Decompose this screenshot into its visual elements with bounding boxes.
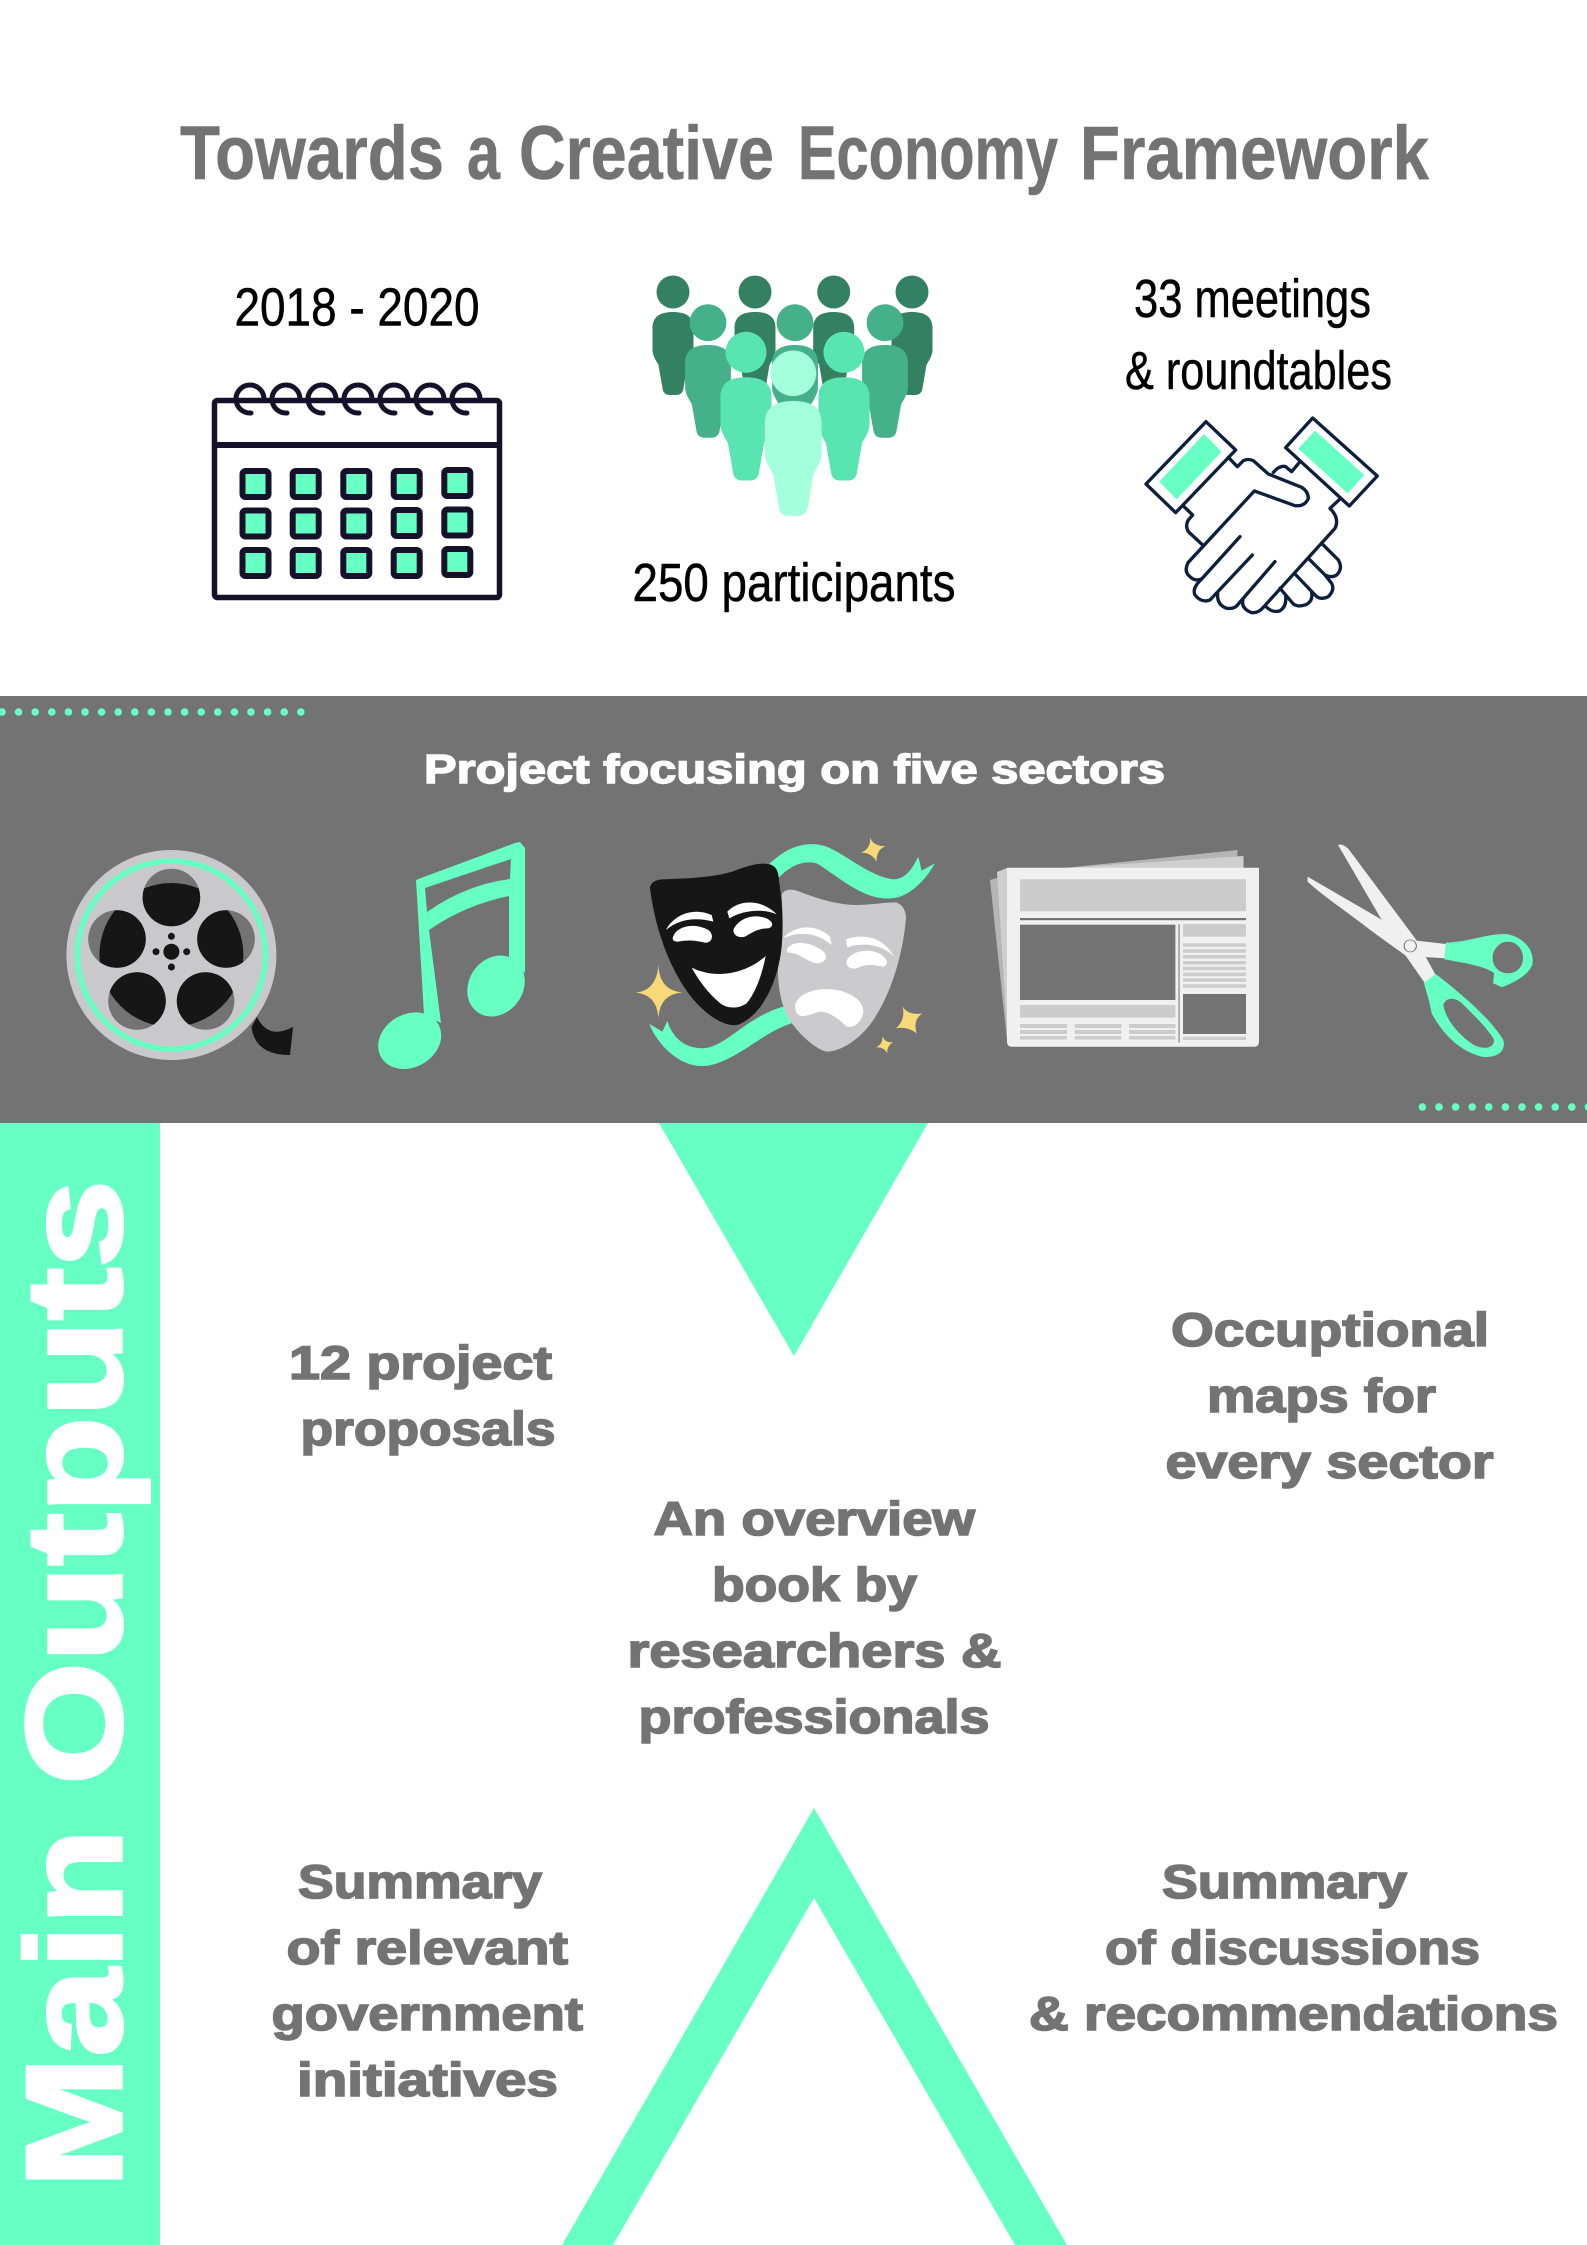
title: Creative [519, 111, 774, 196]
title: Framework [1080, 111, 1430, 196]
sparkles [635, 837, 922, 1053]
participants text: 250 participants [632, 553, 956, 613]
stat: participants [632, 276, 956, 613]
meetings text: 33 meetings [1134, 269, 1371, 329]
icon: newspaper [990, 850, 1259, 1047]
output: discussions and recommendations: of discussions [1105, 1921, 1480, 1974]
icon: music note [368, 842, 536, 1080]
output: discussions and recommendations: Summary [1162, 1855, 1407, 1908]
happy mask [650, 864, 783, 1025]
meetings text: & roundtables [1125, 341, 1392, 401]
title: Economy [798, 111, 1058, 196]
output: occupational maps [1166, 1303, 1494, 1488]
panel: five sectors band [0, 696, 1587, 1123]
decorative triangle pointing down [659, 1123, 928, 1356]
output: government initiatives: initiatives [297, 2053, 558, 2106]
output: occupational maps: Occuptional [1171, 1303, 1489, 1356]
output: overview book: researchers & [628, 1624, 1002, 1677]
sidebar heading: Main Outputs [0, 1180, 150, 2188]
icon: scissors [1308, 845, 1533, 1057]
date text: 2018 - 2020 [234, 278, 480, 338]
output: occupational maps: maps for [1207, 1369, 1436, 1422]
icon: group of people [652, 276, 932, 516]
title: a [467, 111, 501, 196]
decorative outlined triangle [562, 1808, 1067, 2245]
icon: theatre masks [635, 837, 935, 1066]
output: overview book: professionals [638, 1690, 990, 1743]
output: project proposals: 12 project [289, 1336, 552, 1389]
output: government initiatives: government [272, 1987, 583, 2040]
output: overview book: book by [712, 1558, 917, 1611]
output: government initiatives: Summary [298, 1855, 542, 1908]
output: overview book [628, 1492, 1002, 1743]
output: government initiatives [272, 1855, 583, 2106]
ribbon [649, 844, 935, 1066]
output: project proposals: proposals [300, 1402, 556, 1455]
output: occupational maps: every sector [1166, 1435, 1494, 1488]
band heading: Project focusing on five sectors [424, 746, 1165, 792]
stat: meetings [1125, 269, 1392, 613]
icon: film reel [66, 850, 293, 1060]
panel: main outputs sidebar [0, 1123, 160, 2245]
output: government initiatives: of relevant [286, 1921, 568, 1974]
icon: handshake [1146, 418, 1377, 613]
sad mask [778, 890, 906, 1052]
title: Towards [180, 111, 444, 196]
output: project proposals [289, 1336, 556, 1455]
output: overview book: An overview [654, 1492, 976, 1545]
output: discussions and recommendations [1029, 1855, 1558, 2040]
stat: project dates [214, 278, 500, 598]
title [180, 111, 1430, 196]
output: discussions and recommendations: & recommendations [1029, 1987, 1558, 2040]
icon: calendar [214, 385, 500, 598]
meetings text [1125, 269, 1392, 401]
